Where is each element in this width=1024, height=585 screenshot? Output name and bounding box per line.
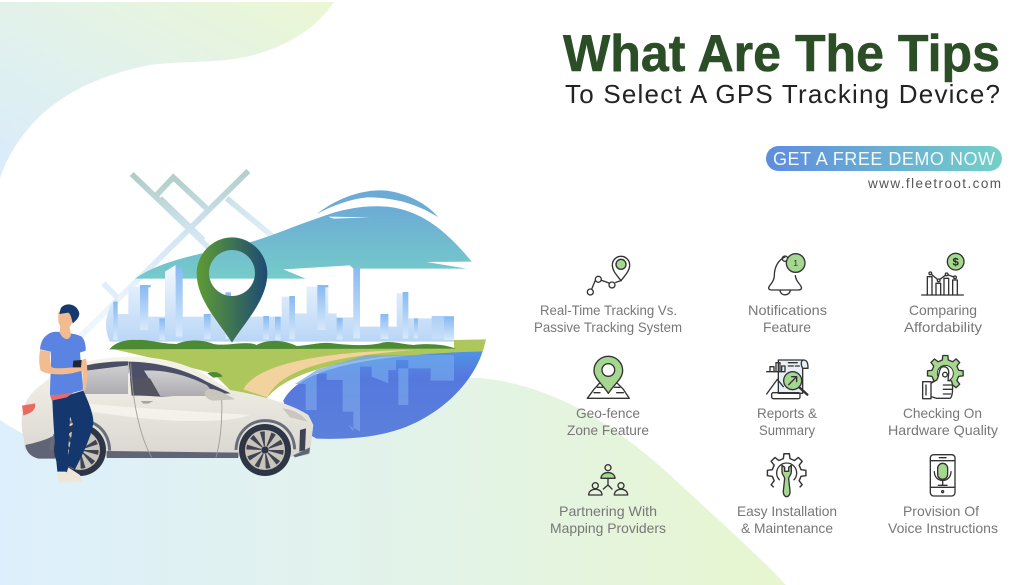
icon: connected people bbox=[589, 465, 628, 495]
icon: thumbs up with gear bbox=[923, 355, 963, 399]
icon: report with magnifier bbox=[767, 360, 808, 399]
background blob: bottom bbox=[0, 378, 786, 585]
label: Reports & bbox=[757, 405, 818, 421]
feature: voice instructions bbox=[888, 455, 998, 536]
grass ground bbox=[110, 339, 486, 398]
subtitle: To Select A GPS Tracking Device? bbox=[565, 79, 1000, 109]
feature: real-time tracking bbox=[534, 256, 682, 335]
icon: dollar coin over bar chart: $ bbox=[953, 257, 960, 269]
label: Passive Tracking System bbox=[534, 319, 682, 335]
sandy path bbox=[243, 350, 413, 397]
label: Hardware Quality bbox=[888, 422, 998, 438]
label: Voice Instructions bbox=[888, 520, 998, 536]
water and reflection bbox=[283, 351, 483, 439]
feature: hardware quality bbox=[888, 355, 998, 438]
label: Feature bbox=[763, 319, 811, 335]
icon: route with location pin bbox=[587, 256, 630, 295]
icon: bell with badge: 1 bbox=[793, 258, 798, 268]
label: Comparing bbox=[909, 302, 977, 318]
label: Geo-fence bbox=[576, 405, 640, 421]
label: Mapping Providers bbox=[550, 520, 666, 536]
feature: geo-fence bbox=[567, 356, 649, 438]
title: What Are The Tips bbox=[563, 25, 1000, 83]
sky and clouds bbox=[135, 190, 472, 279]
feature: reports and summary bbox=[757, 360, 818, 438]
label: Real-Time Tracking Vs. bbox=[540, 302, 677, 318]
front wheel bbox=[236, 421, 295, 476]
title block bbox=[563, 25, 1000, 109]
map pin bbox=[197, 237, 267, 343]
feature: installation and maintenance bbox=[737, 454, 837, 536]
call to action button: GET A FREE DEMO NOW bbox=[773, 149, 995, 169]
city skyline bbox=[106, 265, 454, 342]
feature: comparing affordability bbox=[904, 253, 982, 335]
icon: phone with microphone bbox=[930, 455, 955, 496]
icon: pin on map bbox=[587, 356, 629, 398]
label: Notifications bbox=[748, 302, 827, 318]
label: Partnering With bbox=[559, 503, 657, 519]
feature: mapping providers bbox=[550, 465, 666, 536]
label: & Maintenance bbox=[741, 520, 833, 536]
car bbox=[22, 357, 313, 476]
label: Affordability bbox=[904, 319, 982, 335]
label: Provision Of bbox=[903, 503, 979, 519]
label: Easy Installation bbox=[737, 503, 837, 519]
background blob: top left bbox=[0, 2, 334, 178]
label: Zone Feature bbox=[567, 422, 649, 438]
label: Checking On bbox=[903, 405, 982, 421]
illustration: city, pin, car and person bbox=[22, 171, 486, 483]
website url: www.fleetroot.com bbox=[867, 176, 1001, 191]
label: Summary bbox=[759, 422, 815, 438]
green hills bbox=[109, 340, 456, 349]
person leaning on car bbox=[39, 304, 93, 483]
map roads bbox=[75, 171, 275, 342]
feature: notifications bbox=[748, 254, 827, 335]
rear wheel bbox=[51, 421, 110, 476]
icon: wrench in gear bbox=[767, 454, 806, 497]
